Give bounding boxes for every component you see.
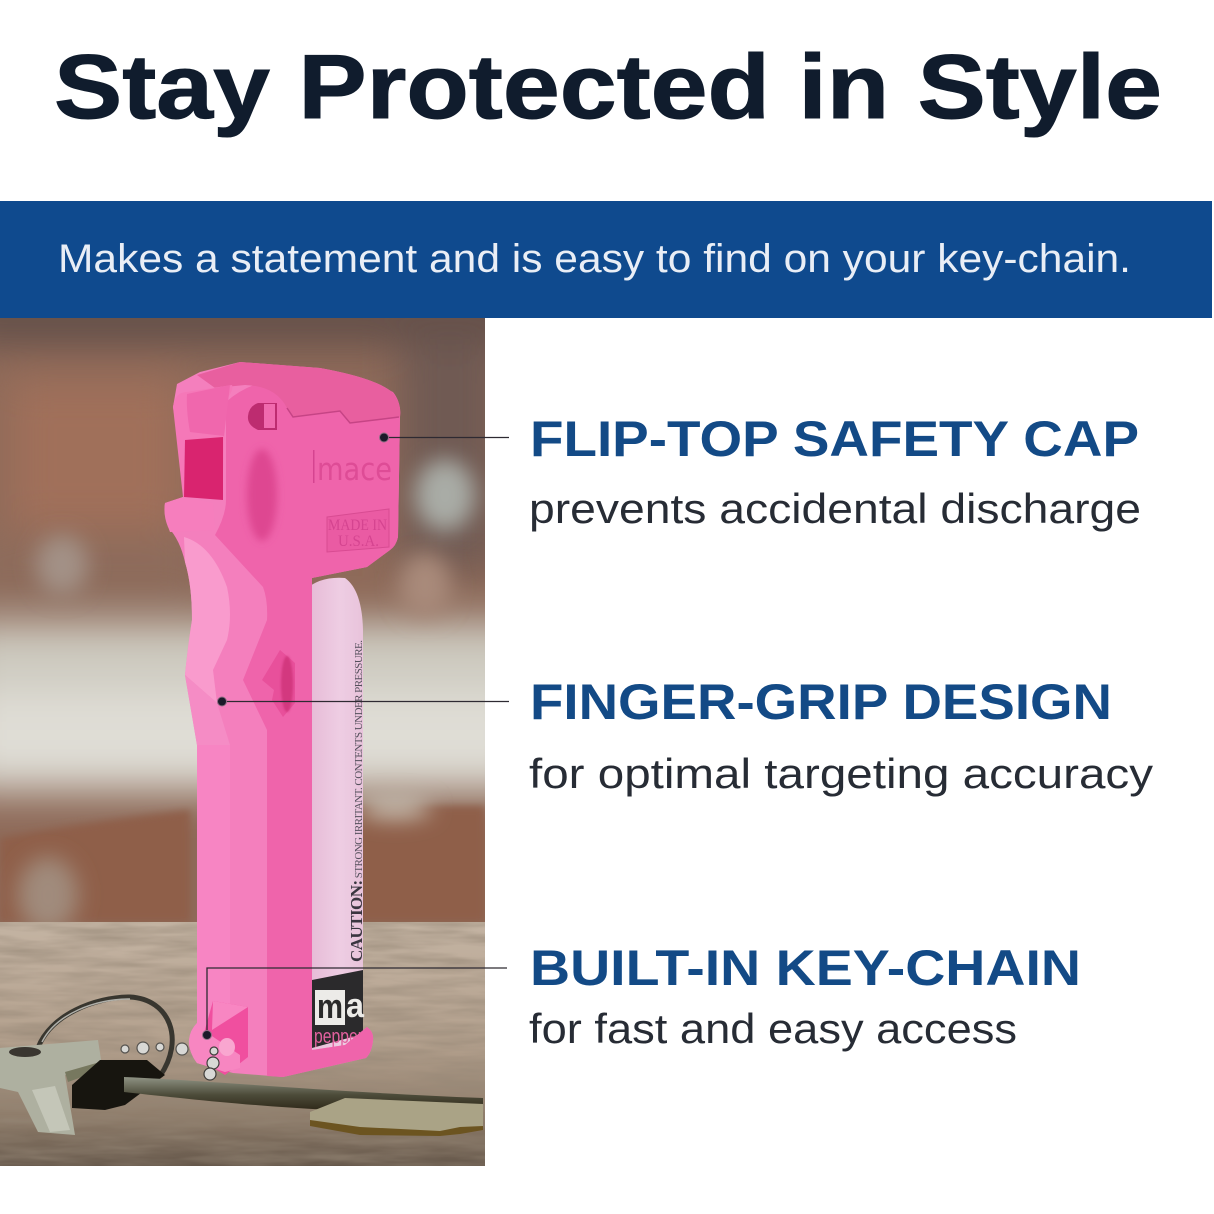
mace label: m — [317, 988, 343, 1026]
description: for optimal targeting accuracy — [529, 750, 1153, 797]
logo emboss: mace — [317, 452, 392, 488]
heading: FLIP-TOP SAFETY CAP — [530, 411, 1139, 467]
logo emboss — [313, 450, 390, 483]
callout: finger-grip design — [218, 674, 1153, 797]
callout: built-in key-chain — [202, 940, 1081, 1052]
side oval recess — [247, 449, 277, 541]
wood table — [0, 922, 485, 1166]
mace label — [312, 970, 365, 1048]
made in usa emboss: U.S.A. — [338, 533, 379, 550]
nozzle channel — [173, 385, 232, 497]
bead chain — [121, 1042, 188, 1055]
darker right face — [215, 377, 400, 1077]
pink dispenser — [164, 362, 400, 1077]
made in usa emboss: MADE IN — [328, 517, 387, 534]
leader line — [218, 697, 509, 706]
keys — [0, 997, 483, 1136]
description: for fast and easy access — [529, 1005, 1017, 1052]
photo background — [0, 318, 485, 1166]
made in usa emboss — [327, 509, 389, 552]
mace label: a — [346, 987, 365, 1025]
dispenser body — [164, 362, 400, 1077]
long key — [124, 1077, 483, 1113]
leader line — [380, 433, 509, 442]
flip cap top — [197, 362, 400, 423]
cap seam — [287, 408, 399, 423]
panel: product photo — [0, 318, 485, 1166]
heading: BUILT-IN KEY-CHAIN — [530, 940, 1081, 996]
canister warning text: CAUTION: STRONG IRRITANT. CONTENTS UNDER PRESSURE. — [347, 640, 366, 962]
grip shoulder — [164, 497, 183, 532]
key ring — [38, 997, 172, 1076]
key-chain loop — [190, 1001, 248, 1080]
canister — [312, 578, 364, 1050]
banner — [0, 201, 1212, 318]
cap hinge slot — [248, 403, 277, 430]
leader line — [202, 968, 507, 1040]
heading: FINGER-GRIP DESIGN — [530, 674, 1112, 730]
title: Stay Protected in Style — [54, 37, 1162, 138]
light left face — [188, 1023, 198, 1064]
description: prevents accidental discharge — [529, 485, 1141, 532]
small key — [0, 1040, 102, 1135]
finger slot — [262, 650, 295, 717]
banner text: Makes a statement and is easy to find on your key-chain. — [58, 237, 1131, 281]
key head black — [72, 1060, 165, 1110]
grip highlight — [184, 537, 230, 703]
callout: flip-top safety cap — [380, 411, 1141, 532]
mace label: pepper — [314, 1026, 363, 1048]
